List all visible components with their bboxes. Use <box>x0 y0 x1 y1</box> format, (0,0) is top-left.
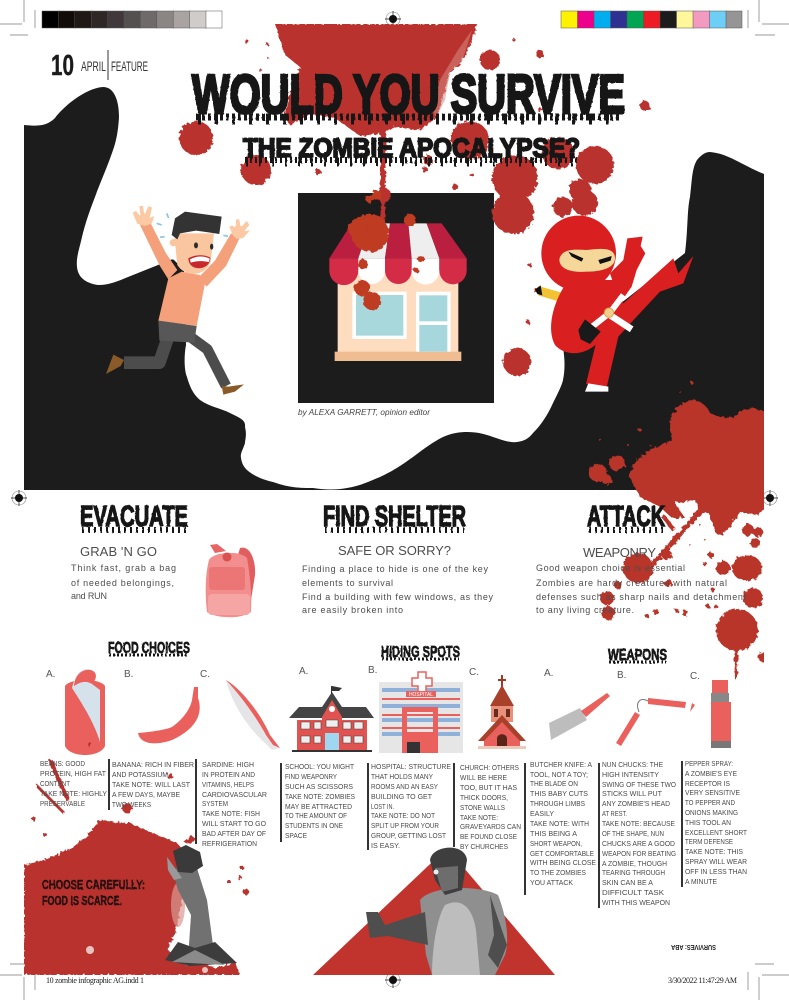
text: school: SUCH AS SCISSORS <box>285 782 353 791</box>
column: attack <box>536 501 746 615</box>
blood on shop <box>348 190 424 310</box>
option letters: C. <box>469 667 479 678</box>
black square behind shop <box>298 193 494 403</box>
subheading: safe or sorry: SAFE OR SORRY? <box>338 543 451 558</box>
text: nun chucks <box>602 760 676 907</box>
text: school: SCHOOL: YOU MIGHT <box>285 762 354 771</box>
text: banana: TAKE NOTE: WILL LAST <box>112 780 190 789</box>
text: pepper spray: OFF IN LESS THAN <box>685 867 747 876</box>
text: hospital: LOST IN. <box>371 802 394 811</box>
text: hospital: TAKE NOTE: DO NOT <box>371 811 435 820</box>
text: nun chucks: SKIN CAN BE A <box>602 878 654 887</box>
text: sardine: REFRIGERATION <box>202 839 257 848</box>
text: butcher knife: TOOL, NOT A TOY; <box>530 770 588 779</box>
text: beans: BEANS: GOOD <box>40 759 85 768</box>
attack text: Zombies are hardy creatures with natural <box>536 578 727 588</box>
text: pepper spray: ONIONS MAKING <box>685 808 738 817</box>
text: hospital: ROOMS AND AN EASY <box>371 782 438 791</box>
text: butcher knife: GET COMFORTABLE <box>530 849 594 858</box>
text: beans: CONTENT <box>40 779 70 788</box>
text: nun chucks: SWING OF THESE TWO <box>602 780 676 789</box>
blood splatter: top <box>179 24 650 376</box>
text: butcher knife: WITH BEING CLOSE <box>530 858 596 867</box>
text: hospital: THAT HOLDS MANY <box>371 772 433 781</box>
icon: school <box>289 686 374 752</box>
text: sardine: SYSTEM <box>202 799 228 808</box>
text: nun chucks: ANY ZOMBIE'S HEAD <box>602 799 670 808</box>
attack text: Good weapon choice is essential <box>536 563 685 573</box>
illustration: man running <box>106 206 250 395</box>
icon: sardine <box>226 680 280 750</box>
text: church: TAKE NOTE: <box>460 813 498 822</box>
text: nun chucks: STICKS WILL PUT <box>602 789 662 798</box>
text: butcher knife: THIS BABY CUTS <box>530 789 588 798</box>
text: sardine: CARDIOVASCULAR <box>202 790 267 799</box>
text: sardine: BAD AFTER DAY OF <box>202 829 266 838</box>
text: nun chucks: WITH THIS WEAPON <box>602 898 670 907</box>
text: butcher knife: SHORT WEAPON, <box>530 839 582 848</box>
text: pepper spray <box>685 759 747 886</box>
text: sardine: WILL START TO GO <box>202 819 266 828</box>
text: hospital: GROUP, GETTING LOST <box>371 831 446 840</box>
shelter text: are easily broken into <box>302 605 403 615</box>
text: hospital <box>371 762 451 850</box>
text: beans: PROTEIN, HIGH FAT <box>40 769 106 778</box>
subtitle: THE ZOMBIE APOCALYPSE? <box>243 133 580 163</box>
text: school: TAKE NOTE: ZOMBIES <box>285 792 355 801</box>
text: pepper spray: A MINUTE <box>685 877 717 886</box>
text: beans <box>40 759 107 808</box>
option letters: B. <box>124 669 133 680</box>
text: hospital: SPLIT UP FROM YOUR <box>371 821 439 830</box>
callout: choose carefully: CHOOSE CAREFULLY: <box>42 877 145 892</box>
heading: evacuate <box>80 501 188 533</box>
grayscale colour bar <box>42 11 222 28</box>
heading: attack <box>587 501 665 533</box>
illustration: shop <box>329 223 467 361</box>
heading: food choices <box>108 640 190 657</box>
icon: nunchucks <box>616 698 695 746</box>
attack text: to any living creature. <box>536 605 634 615</box>
text: pepper spray: THIS TOOL AN <box>685 818 731 827</box>
heading: evacuate: EVACUATE <box>80 501 188 533</box>
text: pepper spray: VERY SENSITIVE <box>685 788 740 797</box>
text: nun chucks: A ZOMBIE, THOUGH <box>602 859 667 868</box>
column: evacuate <box>71 501 255 617</box>
evacuate text <box>71 563 176 601</box>
text: church: WILL BE HERE <box>460 773 507 782</box>
text: butcher knife: BUTCHER KNIFE: A <box>530 760 593 769</box>
text: church: THICK DOORS, <box>460 793 508 802</box>
text: nun chucks: CHUCKS ARE A GOOD <box>602 839 675 848</box>
option letters: B. <box>617 670 626 681</box>
text: church: BE FOUND CLOSE <box>460 832 517 841</box>
column rules <box>108 759 683 908</box>
text: church: GRAVEYARDS CAN <box>460 822 521 831</box>
option letters: A. <box>544 668 553 679</box>
shelter text <box>302 564 494 615</box>
evacuate text: Think fast, grab a bag <box>71 563 176 573</box>
shelter text: Find a building with few windows, as they <box>302 592 494 602</box>
callout: choose carefully <box>42 877 145 908</box>
text: butcher knife: YOU ATTACK <box>530 878 573 887</box>
folio: page number and section: FEATURE <box>111 58 148 74</box>
text: church: STONE WALLS <box>460 803 505 812</box>
text: school: TO THE AMOUNT OF <box>285 811 347 820</box>
text: butcher knife: THE BLADE ON <box>530 779 578 788</box>
text: nun chucks: DIFFICULT TASK <box>602 888 664 897</box>
attack text <box>536 563 746 615</box>
illustration: zombie figure <box>366 848 507 975</box>
folio: page number and section: APRIL <box>81 58 106 74</box>
option letters: A. <box>46 669 55 680</box>
upside-down credit: SURVIVES: ABA <box>671 943 716 950</box>
byline: by ALEXA GARRETT, opinion editor <box>298 408 430 417</box>
subheading: grab n go: GRAB 'N GO <box>80 544 157 559</box>
text: nun chucks: OF THE SHAPE, NUN <box>602 829 664 838</box>
pale streaks in the top blood <box>432 30 472 118</box>
text: nun chucks: HIGH INTENSITY <box>602 770 659 779</box>
text: nun chucks: NUN CHUCKS: THE <box>602 760 663 769</box>
text: hospital: HOSPITAL: STRUCTURE <box>371 762 451 771</box>
icon: church <box>478 675 526 749</box>
text: school: MAY BE ATTRACTED <box>285 802 352 811</box>
text: butcher knife: EASILY <box>530 809 554 818</box>
text: butcher knife: TAKE NOTE: WITH <box>530 819 589 828</box>
text: pepper spray: TO PEPPER AND <box>685 798 735 807</box>
subheading: weaponry: WEAPONRY <box>583 545 656 560</box>
folio: page number and section <box>51 50 148 82</box>
icon: hospital: HOSPITAL <box>409 692 433 698</box>
text: hospital: IS EASY. <box>371 841 400 850</box>
text: butcher knife: THIS BEING A <box>530 829 578 838</box>
text: sardine: IN PROTEIN AND <box>202 770 255 779</box>
option letters: C. <box>200 669 210 680</box>
text: pepper spray: A ZOMBIE'S EYE <box>685 769 737 778</box>
icon: hospital <box>379 672 463 753</box>
option letters <box>46 665 700 682</box>
text: butcher knife <box>530 760 596 887</box>
text: nun chucks: TEARING THROUGH <box>602 868 665 877</box>
text: banana: BANANA: RICH IN FIBER <box>112 760 194 769</box>
text: school: SPACE <box>285 831 307 840</box>
text: butcher knife: TO THE ZOMBIES <box>530 868 586 877</box>
text: pepper spray: TAKE NOTE: THIS <box>685 847 743 856</box>
text: pepper spray: RECEPTOR IS <box>685 779 730 788</box>
pale texture in lower blood <box>86 883 208 973</box>
shelter text: Finding a place to hide is one of the key <box>302 564 488 574</box>
text: school: FIND WEAPONRY <box>285 772 337 781</box>
heading: attack: ATTACK <box>587 501 665 533</box>
option letters: B. <box>368 665 377 676</box>
column: find shelter <box>302 501 494 615</box>
text: sardine: TAKE NOTE: FISH <box>202 809 260 818</box>
icon: backpack <box>206 544 255 617</box>
text: pepper spray: PEPPER SPRAY: <box>685 759 733 768</box>
icon: can of beans <box>65 669 105 755</box>
text: pepper spray: SPRAY WILL WEAR <box>685 857 747 866</box>
title: WOULD YOU SURVIVE <box>192 63 625 125</box>
blood splatter: lower left <box>24 743 249 975</box>
evacuate text: of needed belongings, <box>71 578 174 588</box>
text: nun chucks: TAKE NOTE: BECAUSE <box>602 819 675 828</box>
shelter text: elements to survival <box>302 578 393 588</box>
text: nun chucks: AT REST. <box>602 809 627 818</box>
icon: butcher knife <box>549 693 610 740</box>
icon: pepper spray <box>711 680 731 748</box>
print slug: file name: 10 zombie infographic AG.indd 1 <box>46 976 144 985</box>
heading: hiding spots <box>381 644 460 661</box>
text: banana: AND POTASSIUM <box>112 770 168 779</box>
option letters: C. <box>690 671 700 682</box>
text: butcher knife: THROUGH LIMBS <box>530 799 585 808</box>
text: sardine <box>202 760 267 848</box>
heading: hiding spots: HIDING SPOTS <box>381 644 460 661</box>
text: school: STUDENTS IN ONE <box>285 821 343 830</box>
text: banana <box>112 760 194 809</box>
text: pepper spray: TERM DEFENSE <box>685 837 733 846</box>
text: sardine: SARDINE: HIGH <box>202 760 254 769</box>
red triangle <box>313 848 555 975</box>
print slug: date: 3/30/2022 11:47:29 AM <box>668 976 737 985</box>
evacuate text: and RUN <box>71 591 107 601</box>
attack text: defenses such as sharp nails and detachment <box>536 592 746 602</box>
text columns <box>40 759 747 908</box>
process colour bar <box>561 11 742 28</box>
text: banana: TWO WEEKS <box>112 800 151 809</box>
heading: food choices: FOOD CHOICES <box>108 640 190 657</box>
text: school <box>285 762 355 840</box>
illustration: red ninja <box>535 216 693 392</box>
text: beans: TAKE NOTE: HIGHLY <box>40 789 107 798</box>
text: church: CHURCH: OTHERS <box>460 763 519 772</box>
text: hospital: BUILDING TO GET <box>371 792 432 801</box>
illustration: zombie hand rising <box>165 845 237 966</box>
icon: banana <box>138 687 200 743</box>
text: nun chucks: WEAPON FOR BEATING <box>602 849 676 858</box>
text: beans: PRESERVABLE <box>40 799 85 808</box>
text: banana: A FEW DAYS, MAYBE <box>112 790 180 799</box>
callout: choose carefully: FOOD IS SCARCE. <box>42 893 122 908</box>
heading: weapons: WEAPONS <box>608 647 667 664</box>
text: sardine: VITAMINS, HELPS <box>202 780 254 789</box>
text: church: BY CHURCHES <box>460 842 508 851</box>
blood splatter: lower right <box>589 382 770 680</box>
text: church <box>460 763 521 851</box>
folio: page number and section: 10 <box>51 50 74 82</box>
option letters: A. <box>299 666 308 677</box>
heading: find shelter: FIND SHELTER <box>323 501 466 533</box>
text: church: TOO, BUT IT HAS <box>460 783 517 792</box>
text: pepper spray: EXCELLENT SHORT <box>685 828 747 837</box>
black wave background <box>24 87 764 490</box>
